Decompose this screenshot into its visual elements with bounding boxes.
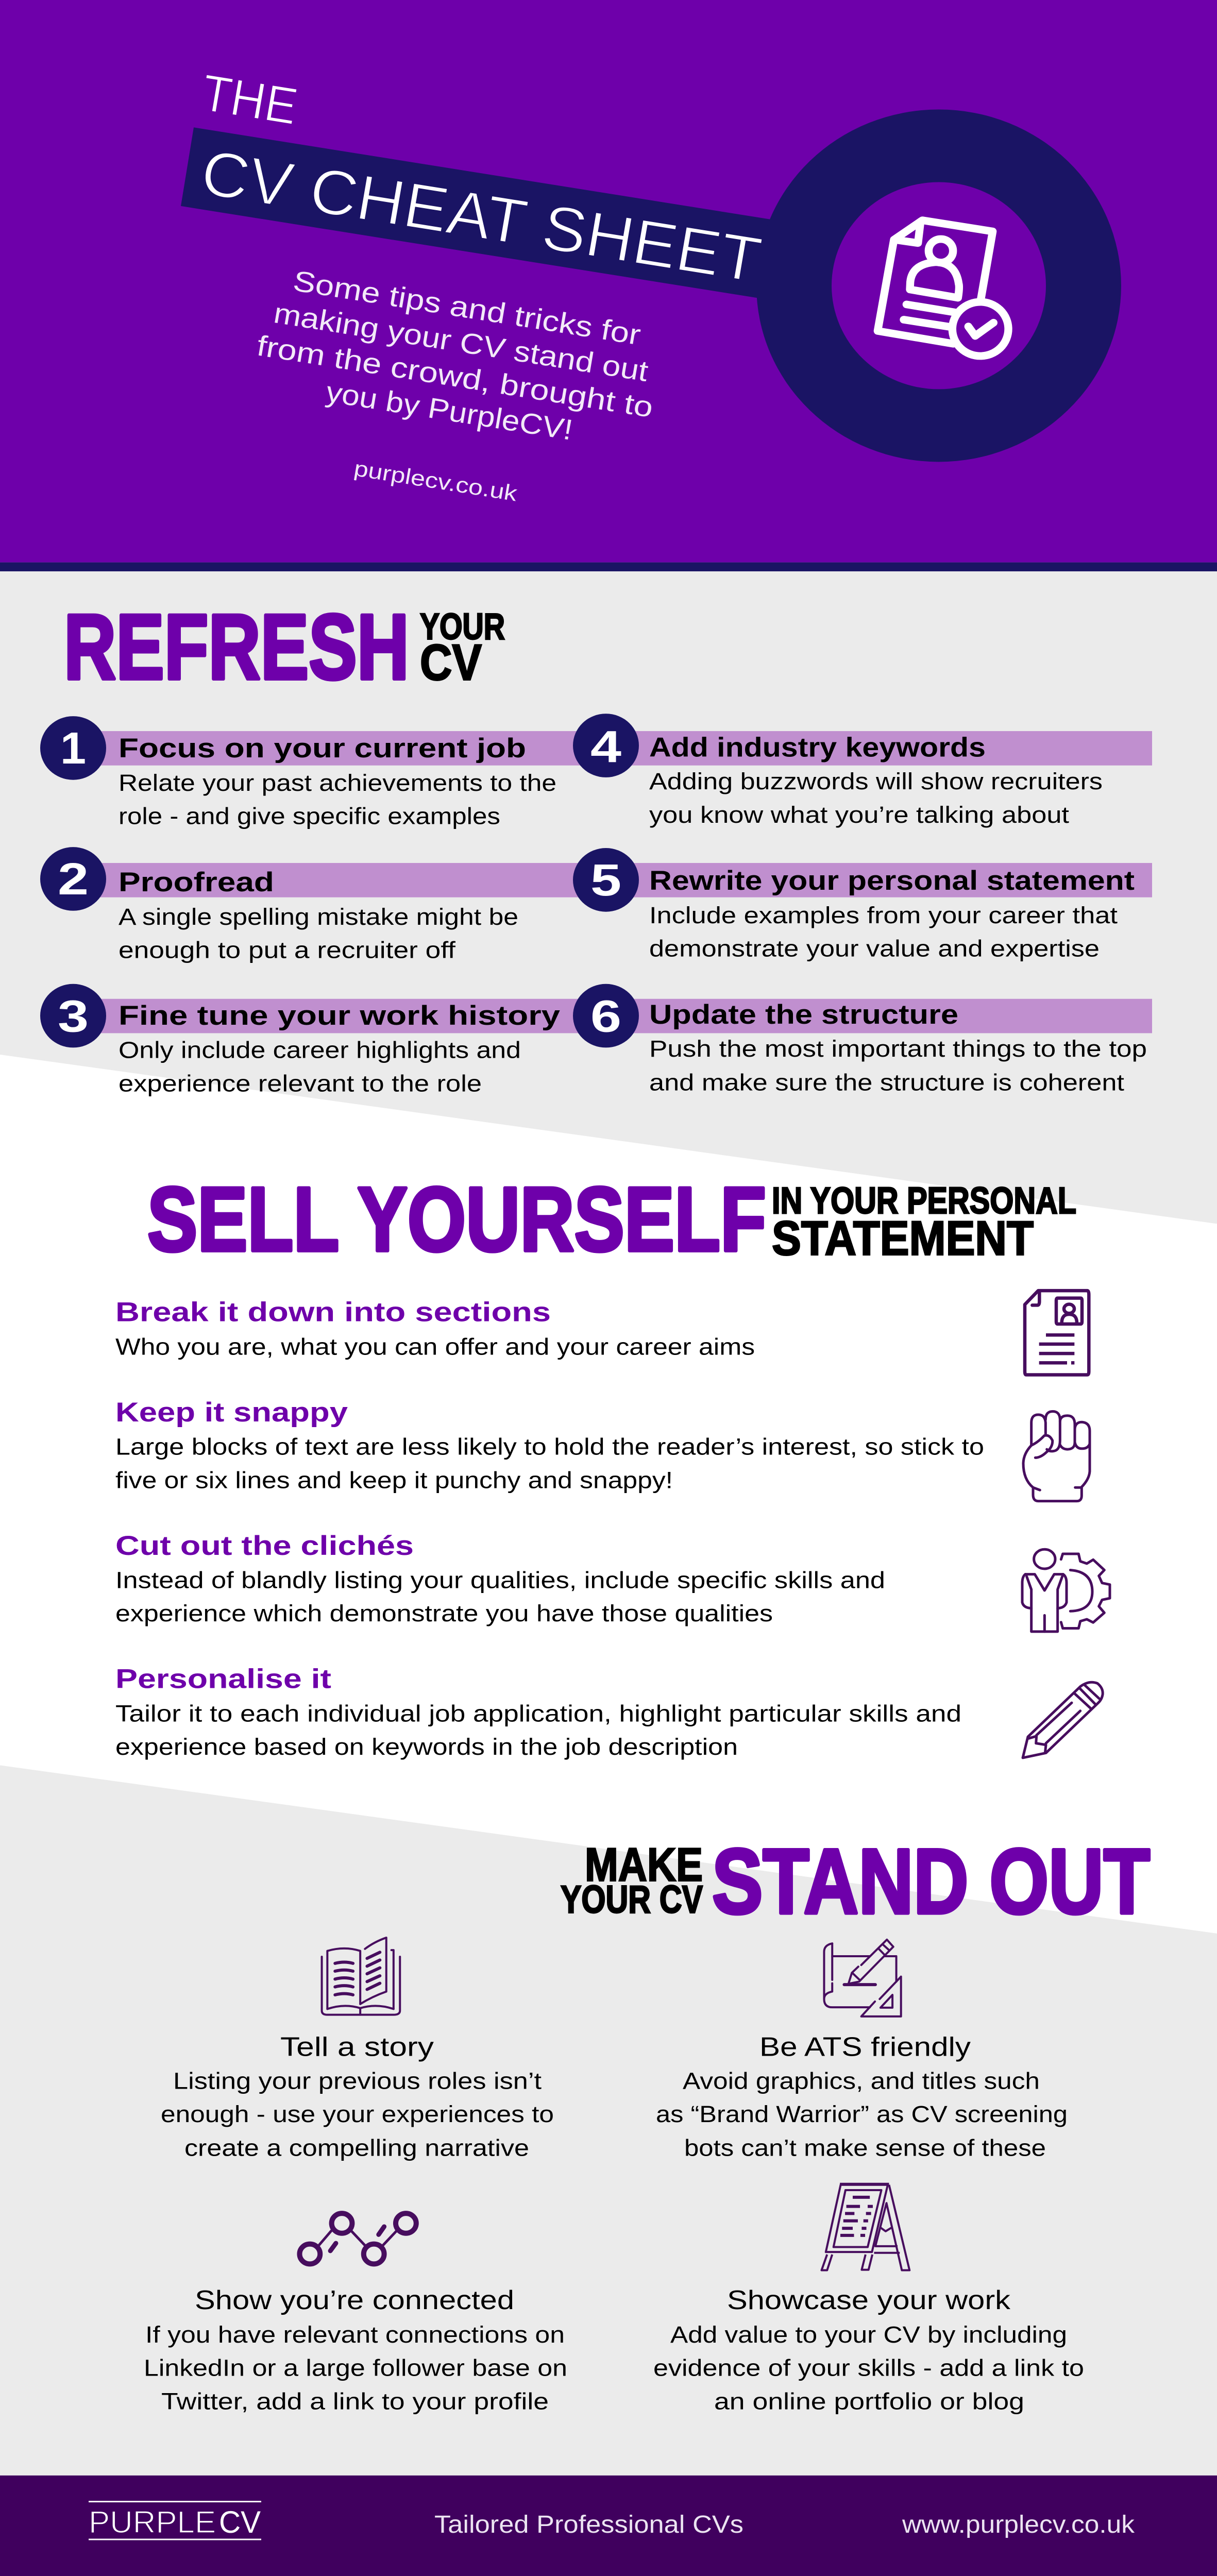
tip 6: and make sure the structure is coherent	[649, 1069, 1124, 1095]
tip 2	[40, 847, 518, 963]
tip 5: demonstrate your value and expertise	[649, 935, 1100, 961]
highlight bar row 3	[73, 999, 1152, 1033]
text: break it down: Break it down into sections	[115, 1297, 551, 1328]
tip 5: Rewrite your personal statement	[649, 866, 1135, 896]
text: keep it snappy	[115, 1397, 984, 1493]
text: showcase your work: an online portfolio or blog	[714, 2388, 1024, 2414]
icon: pencil	[1023, 1682, 1103, 1758]
tagline: Tailored Professional CVs	[434, 2511, 743, 2538]
tip 4: Adding buzzwords will show recruiters	[649, 768, 1103, 794]
tip 3: Only include career highlights and	[119, 1037, 521, 1063]
tip 1: Focus on your current job	[119, 733, 526, 764]
text: personalise it: Tailor it to each individual job application, highlight particular skills and	[115, 1700, 961, 1726]
text: break it down	[115, 1297, 755, 1360]
tip 1: Relate your past achievements to the	[119, 770, 556, 796]
tip 5	[573, 848, 1135, 961]
tip 2: A single spelling mistake might be	[119, 904, 518, 930]
heading: sell yourself in your personal statement: STATEMENT	[772, 1212, 1034, 1265]
tip 4: you know what you’re talking about	[649, 802, 1069, 828]
text: show you're connected: Twitter, add a link to your profile	[161, 2388, 549, 2414]
text: showcase your work	[653, 2285, 1084, 2414]
logo: PurpleCV	[89, 2501, 261, 2540]
text: personalise it: experience based on keywords in the job description	[115, 1734, 738, 1760]
highlight bar row 1	[73, 731, 1152, 766]
text: cut out the cliches: Instead of blandly listing your qualities, include specific skills and	[115, 1567, 885, 1593]
text: keep it snappy: Keep it snappy	[115, 1397, 348, 1428]
tip 5: Include examples from your career that	[649, 902, 1118, 928]
header panel	[0, 0, 1217, 571]
tip 2: Proofread	[119, 867, 274, 897]
text: personalise it	[115, 1664, 961, 1760]
tip 6: Update the structure	[649, 999, 958, 1030]
text: tell a story: Listing your previous roles isn’t	[173, 2067, 542, 2094]
heading: refresh your CV: CV	[420, 634, 482, 691]
icon: person and gear	[1022, 1549, 1110, 1632]
website link: purplecv.co.uk	[352, 456, 519, 506]
subtitle: you by PurpleCV!	[324, 376, 575, 447]
heading: refresh your CV: YOUR	[420, 606, 505, 647]
panel: refresh your CV	[40, 595, 1152, 1096]
heading: make your CV stand out: YOUR CV	[561, 1878, 703, 1921]
subtitle: Some tips and tricks for	[291, 265, 643, 351]
text: personalise it: Personalise it	[115, 1664, 331, 1694]
text: tell a story	[161, 2032, 554, 2161]
tip 3: 3	[58, 991, 89, 1041]
icon: blueprint with pencil and set square	[824, 1940, 901, 2016]
icon inner disc	[832, 182, 1046, 389]
icon: connected nodes	[299, 2213, 416, 2264]
text: show you're connected: Show you’re connected	[195, 2285, 514, 2315]
tip 6	[573, 984, 1147, 1095]
logo: PurpleCV: PURPLE	[89, 2505, 216, 2539]
text: show you're connected	[144, 2285, 567, 2414]
heading: make your CV stand out: MAKE	[585, 1838, 703, 1891]
tip 3: Fine tune your work history	[119, 1001, 560, 1031]
text: be ATS friendly: as “Brand Warrior” as CV screening	[656, 2101, 1068, 2127]
heading: THE: THE	[197, 63, 302, 135]
tip 6: 6	[590, 991, 621, 1041]
tip 5: 5	[590, 855, 621, 905]
heading: refresh your CV: REFRESH	[64, 595, 409, 699]
text: show you're connected: If you have relevant connections on	[145, 2321, 565, 2348]
subtitle: from the crowd, brought to	[255, 329, 655, 424]
heading: CV CHEAT SHEET: CV CHEAT SHEET	[196, 136, 766, 296]
text: be ATS friendly: bots can’t make sense of these	[684, 2134, 1046, 2161]
text: cut out the cliches: Cut out the clichés	[115, 1531, 414, 1561]
text: break it down: Who you are, what you can offer and your career aims	[115, 1333, 755, 1360]
footer website: www.purplecv.co.uk	[902, 2511, 1135, 2538]
text: cut out the cliches: experience which demonstrate you have those qualities	[115, 1600, 773, 1626]
text: keep it snappy: five or six lines and keep it punchy and snappy!	[115, 1467, 673, 1493]
icon: open book	[322, 1938, 400, 2015]
background band: stand out section	[0, 1765, 1217, 2476]
text: showcase your work: evidence of your skills - add a link to	[653, 2354, 1084, 2381]
subtitle: making your CV stand out	[272, 297, 651, 388]
text: showcase your work: Add value to your CV by including	[670, 2321, 1067, 2348]
background band: refresh section	[0, 571, 1217, 1224]
title banner	[181, 127, 824, 309]
subtitle	[255, 265, 655, 447]
icon ring	[756, 110, 1121, 462]
text: cut out the cliches	[115, 1531, 885, 1626]
tip 4: Add industry keywords	[649, 732, 986, 762]
tip 1	[40, 716, 556, 829]
icon: fist	[1023, 1412, 1090, 1501]
text: be ATS friendly: Avoid graphics, and titles such	[683, 2067, 1040, 2094]
tip 3: experience relevant to the role	[119, 1070, 482, 1096]
text: tell a story: Tell a story	[280, 2032, 434, 2062]
tip 4	[573, 714, 1103, 828]
panel: sell yourself	[115, 1168, 1110, 1760]
text: tell a story: enough - use your experiences to	[161, 2101, 554, 2127]
tip 6: Push the most important things to the top	[649, 1036, 1147, 1062]
tip 1: 1	[60, 723, 86, 773]
icon: easel board	[821, 2184, 909, 2270]
text: tell a story: create a compelling narrative	[184, 2134, 529, 2161]
footer	[0, 2476, 1217, 2576]
tip 1: role - and give specific examples	[119, 803, 500, 829]
tip 2: 2	[58, 854, 89, 904]
heading: sell yourself in your personal statement: IN YOUR PERSONAL	[772, 1179, 1076, 1222]
text: be ATS friendly	[656, 2032, 1068, 2161]
panel: make your CV stand out	[144, 1829, 1150, 2414]
logo: PurpleCV: CV	[219, 2505, 261, 2539]
tip 2: enough to put a recruiter off	[119, 937, 455, 963]
text: showcase your work: Showcase your work	[727, 2285, 1011, 2315]
icon: document	[1025, 1291, 1089, 1375]
text: be ATS friendly: Be ATS friendly	[759, 2032, 971, 2062]
icon: CV document with check mark	[877, 221, 1008, 356]
tip 3	[40, 984, 560, 1096]
text: keep it snappy: Large blocks of text are less likely to hold the reader’s interest, so stick to	[115, 1433, 984, 1460]
text: show you're connected: LinkedIn or a large follower base on	[144, 2354, 567, 2381]
heading: sell yourself in your personal statement: SELL YOURSELF	[147, 1168, 766, 1270]
tip 4: 4	[590, 721, 621, 772]
heading: make your CV stand out	[561, 1829, 1150, 1933]
highlight bar row 2	[73, 863, 1152, 897]
